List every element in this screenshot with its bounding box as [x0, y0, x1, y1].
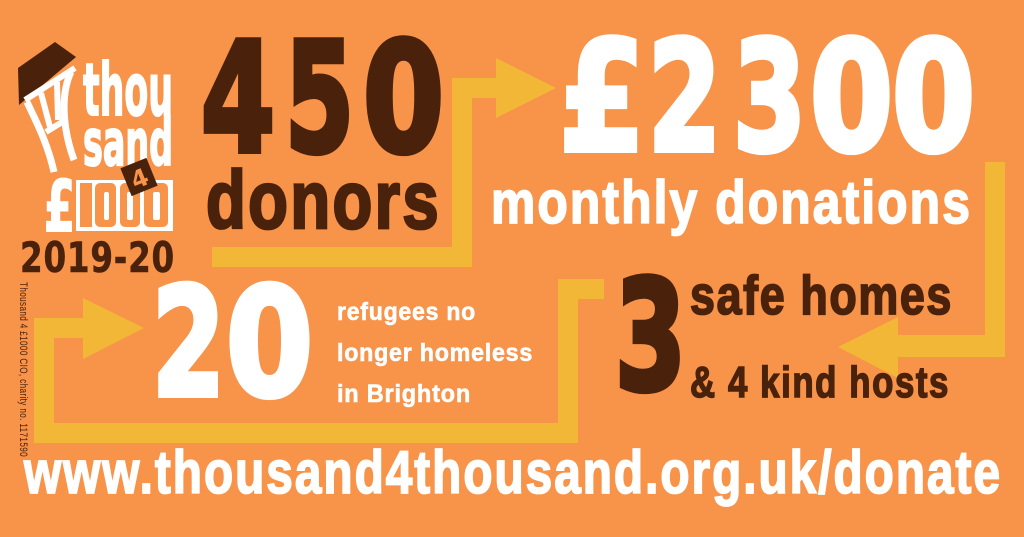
stat: 450: 5	[285, 10, 354, 187]
text block: refugees no longer homeless in Brighton: in Brighton	[337, 380, 471, 408]
stat: £2300: £	[559, 9, 645, 186]
year label: 2019-20	[20, 233, 175, 282]
stat: £2300	[559, 9, 975, 186]
icon: white chair	[25, 68, 75, 172]
stat: £2300: 0	[892, 9, 975, 186]
stat: £2300: 3	[733, 9, 806, 186]
text block: refugees no longer homeless in Brighton: longer homeless	[337, 339, 533, 367]
label: donors: donors	[206, 155, 441, 246]
text block: refugees no longer homeless in Brighton: refugees no	[337, 298, 476, 326]
charity registration note: Thousand 4 £1000 CIO, charity no. 1171590	[17, 282, 29, 457]
text block: refugees no longer homeless in Brighton	[337, 298, 533, 408]
logo: pound sign: £	[44, 166, 75, 248]
infographic canvas: thou	[83, 48, 173, 132]
arrow: monthly donations to safe homes	[838, 162, 1005, 378]
logo text: sand: sand	[83, 107, 173, 181]
logo: 1000 box	[76, 180, 173, 231]
stat: 20	[152, 257, 313, 431]
stat: 450: 0	[363, 10, 444, 187]
stat: £2300: 2	[648, 9, 721, 186]
stat: 450: 4	[201, 10, 275, 187]
label: safe homes: safe homes	[690, 264, 953, 326]
stat: 3: 3	[615, 248, 686, 425]
logo: 4 badge: 4	[127, 163, 153, 195]
stat: 20: 2	[152, 257, 225, 431]
stat: 450	[201, 10, 444, 187]
arrow: donors to monthly donations	[212, 58, 556, 267]
arrow: safe homes to refugees	[34, 279, 604, 443]
stat: 20: 0	[226, 257, 313, 431]
label: and 4 kind hosts: & 4 kind hosts	[690, 358, 950, 407]
icon: house roof	[18, 42, 76, 105]
logo: 4 badge	[120, 158, 158, 197]
stat: £2300: 0	[810, 9, 893, 186]
logo: Thousand 4 £1000	[18, 42, 173, 248]
